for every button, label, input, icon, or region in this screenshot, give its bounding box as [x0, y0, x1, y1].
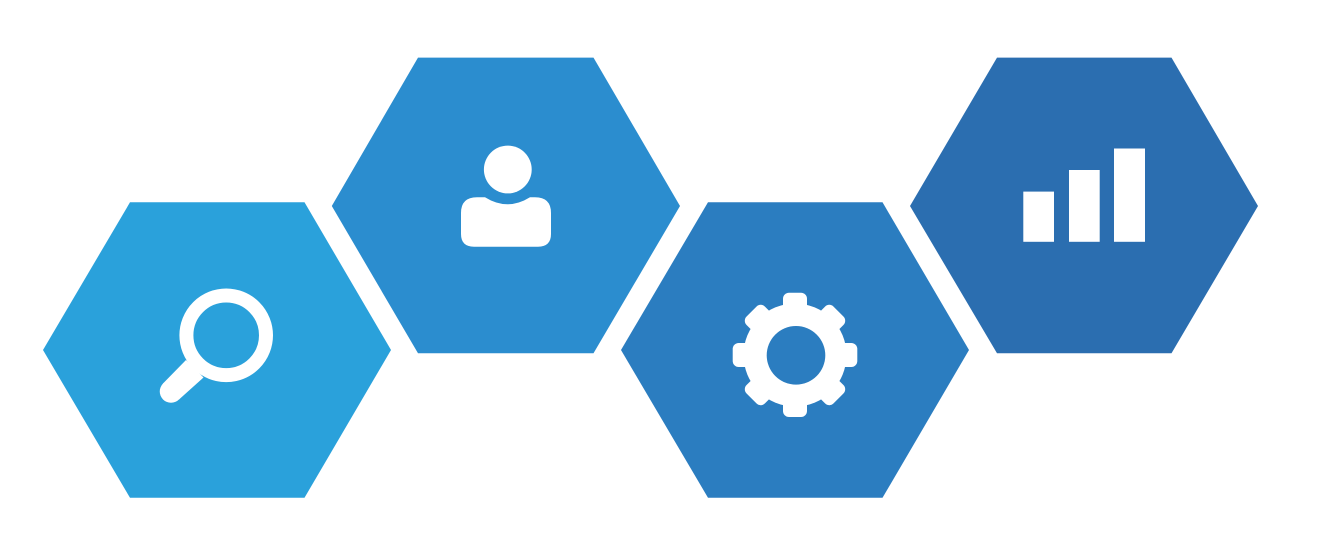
icon: bar chart: [1023, 148, 1145, 242]
panel: gear hexagon: [621, 202, 969, 498]
panel: chart hexagon: [910, 58, 1258, 353]
panel: search hexagon: [43, 202, 391, 498]
icon: magnifying glass: [160, 296, 266, 403]
panel: user hexagon: [332, 58, 680, 353]
icon: user: [461, 146, 551, 247]
icon: gear: [733, 293, 857, 417]
